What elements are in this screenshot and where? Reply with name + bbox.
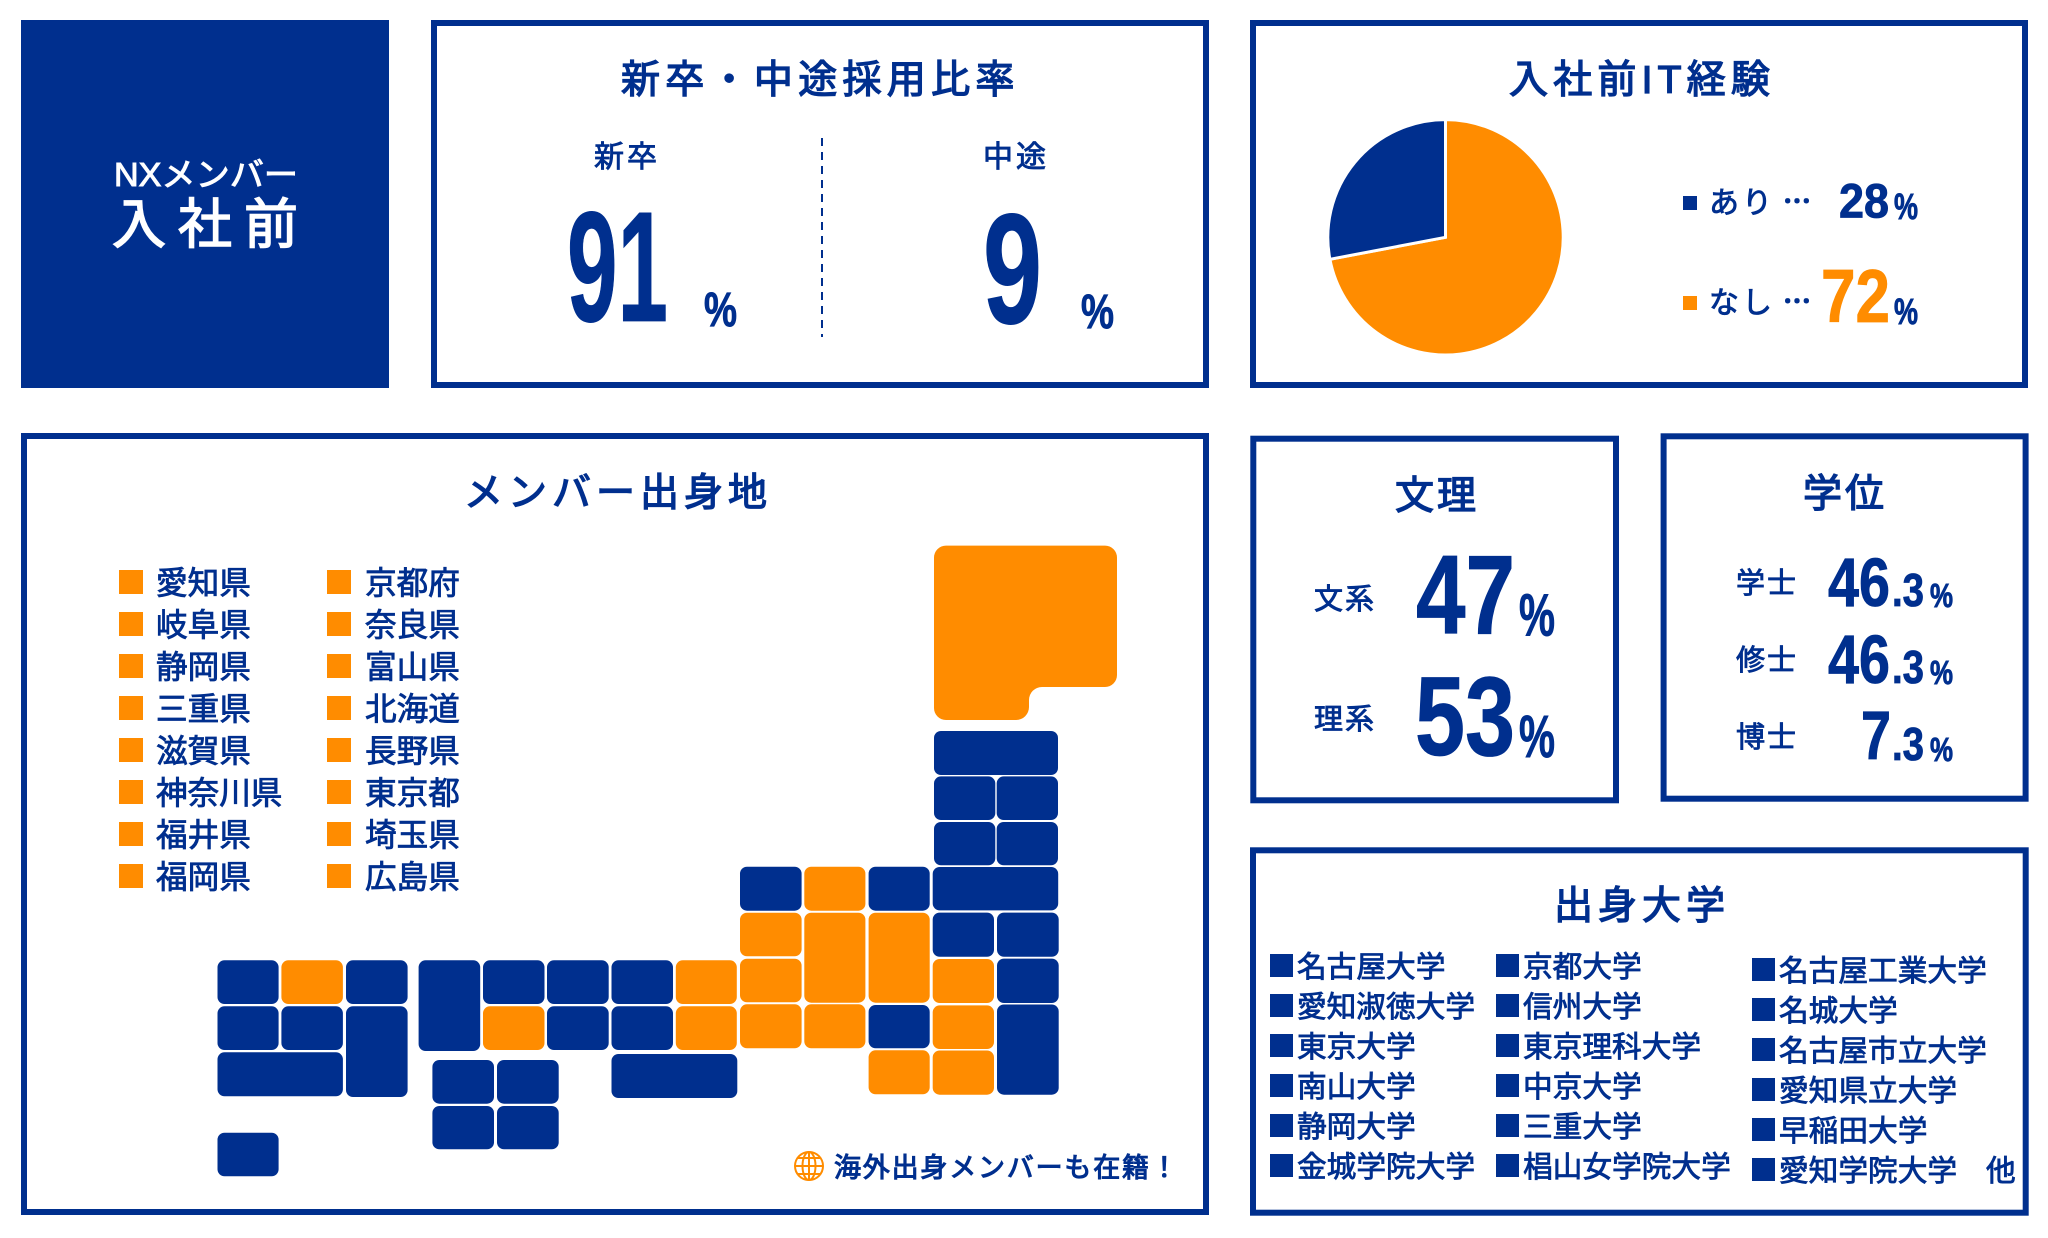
university list: column 1: 愛知淑徳大学 xyxy=(1297,991,1475,1024)
stat: bachelor 46.3%: % xyxy=(1930,577,1953,614)
stat: master 46.3%: 46 xyxy=(1828,621,1890,698)
stat: sciences 53%: % xyxy=(1519,704,1555,770)
stat: mid-career 9% xyxy=(983,141,1114,357)
university list: column 3: 愛知学院大学 xyxy=(1779,1155,1957,1188)
stat: master 46.3%: % xyxy=(1930,654,1953,691)
stat: new graduates 91%: 新卒 xyxy=(594,141,660,174)
legend: no 72% xyxy=(1683,254,1918,338)
prefecture list: column 2: 北海道 xyxy=(365,691,460,727)
university list: column 2: 東京理科大学 xyxy=(1523,1031,1701,1064)
stat: doctorate 7.3% xyxy=(1736,697,1953,774)
stat: humanities 47%: % xyxy=(1519,583,1555,649)
stat: doctorate 7.3%: 博士 xyxy=(1736,721,1798,754)
stat: humanities 47% xyxy=(1314,532,1555,658)
heading: humanities and sciences: 文理 xyxy=(1395,475,1479,518)
map: Shikoku xyxy=(432,1060,559,1149)
heading: alma maters: 出身大学 xyxy=(1554,885,1730,928)
stat: bachelor 46.3%: 学士 xyxy=(1736,567,1798,600)
prefecture list: column 1 xyxy=(119,565,282,895)
stat: new graduates 91%: 91 xyxy=(567,180,668,355)
stat: new graduates 91%: % xyxy=(704,284,737,337)
prefecture list: column 1: 福井県 xyxy=(156,817,251,853)
legend: no 72%: 72 xyxy=(1821,254,1890,338)
map: Kinki xyxy=(612,960,737,1098)
legend: yes 28%: … xyxy=(1783,181,1811,221)
prefecture list: column 1: 静岡県 xyxy=(156,649,251,685)
university list: column 2: 椙山女学院大学 xyxy=(1523,1151,1731,1184)
stat: master 46.3% xyxy=(1736,621,1953,698)
panel: degree xyxy=(1664,436,2026,799)
university list: column 3: 愛知県立大学 xyxy=(1779,1075,1957,1108)
map: Chugoku xyxy=(419,960,609,1051)
university list: column 1 xyxy=(1270,951,1475,1184)
university list: column 2: 京都大学 xyxy=(1523,951,1642,984)
university list: column 3: 名城大学 xyxy=(1779,995,1898,1028)
stat: mid-career 9%: 中途 xyxy=(983,141,1049,174)
title block: NX members before joining xyxy=(21,20,389,388)
legend: yes 28%: 28 xyxy=(1839,176,1889,228)
stat: humanities 47%: 47 xyxy=(1416,532,1515,658)
university list: column 1: 南山大学 xyxy=(1297,1071,1416,1104)
stat: bachelor 46.3%: 46 xyxy=(1828,544,1890,621)
map: Chubu xyxy=(740,867,930,1094)
panel: new graduate / mid-career ratio xyxy=(434,23,1206,385)
stat: mid-career 9%: % xyxy=(1081,286,1114,339)
university list: column 1: 静岡大学 xyxy=(1297,1111,1416,1144)
prefecture list: column 1: 愛知県 xyxy=(156,565,251,601)
prefecture list: column 2: 東京都 xyxy=(365,775,460,811)
prefecture list: column 1: 福岡県 xyxy=(156,859,251,895)
stat: mid-career 9%: 9 xyxy=(983,182,1042,357)
legend: yes 28% xyxy=(1683,176,1918,228)
heading: IT experience: 入社前IT経験 xyxy=(1509,59,1775,102)
legend: yes 28%: % xyxy=(1894,186,1918,227)
prefecture list: column 2: 京都府 xyxy=(365,565,460,601)
map: Hokkaido xyxy=(934,546,1117,720)
university list: column 2: 中京大学 xyxy=(1523,1071,1642,1104)
prefecture list: column 1: 岐阜県 xyxy=(156,607,251,643)
map: Kyushu xyxy=(218,960,408,1097)
heading: member origin: メンバー出身地 xyxy=(464,472,772,515)
icon: globe xyxy=(795,1152,823,1180)
stat: bachelor 46.3%: .3 xyxy=(1892,564,1924,616)
heading: degree: 学位 xyxy=(1803,473,1887,516)
title block: NX members before joining: 入社前 xyxy=(112,195,310,255)
stat: bachelor 46.3% xyxy=(1736,544,1953,621)
stat: sciences 53%: 理系 xyxy=(1314,704,1376,736)
stat: sciences 53% xyxy=(1314,654,1555,779)
tile map of Japan xyxy=(218,546,1117,1176)
university list: column 3: 名古屋工業大学 xyxy=(1779,955,1987,988)
panel: pre-joining IT experience xyxy=(1253,23,2025,385)
prefecture list: column 2: 埼玉県 xyxy=(365,817,460,853)
university list: column 1: 金城学院大学 xyxy=(1297,1151,1475,1184)
university list: column 3: 他 xyxy=(1986,1155,2016,1188)
map: Okinawa xyxy=(218,1133,279,1176)
prefecture list: column 2: 広島県 xyxy=(365,859,460,895)
stat: doctorate 7.3%: % xyxy=(1930,731,1953,768)
prefecture list: column 1: 滋賀県 xyxy=(156,733,251,769)
panel: member hometowns xyxy=(24,436,1206,1212)
stat: master 46.3%: .3 xyxy=(1892,641,1924,693)
prefecture list: column 2: 奈良県 xyxy=(365,607,460,643)
legend: no 72%: なし xyxy=(1709,287,1775,320)
stat: doctorate 7.3%: .3 xyxy=(1892,718,1924,770)
stat: sciences 53%: 53 xyxy=(1415,654,1515,779)
stat: master 46.3%: 修士 xyxy=(1736,644,1798,677)
university list: column 1: 名古屋大学 xyxy=(1297,951,1445,984)
university list: column 2: 信州大学 xyxy=(1523,991,1642,1024)
title block: NX members before joining: NXメンバー xyxy=(114,156,298,193)
heading: hiring ratio: 新卒・中途採用比率 xyxy=(621,59,1020,102)
stat: doctorate 7.3%: 7 xyxy=(1861,697,1891,774)
prefecture list: column 1: 三重県 xyxy=(156,691,251,727)
panel: universities xyxy=(1253,850,2026,1213)
university list: column 3: 早稲田大学 xyxy=(1779,1115,1927,1148)
legend: yes 28%: あり xyxy=(1709,187,1775,220)
note: overseas members: 海外出身メンバーも在籍！ xyxy=(834,1153,1180,1183)
university list: column 2: 三重大学 xyxy=(1523,1111,1642,1144)
legend: no 72%: … xyxy=(1783,281,1811,321)
university list: column 3 xyxy=(1752,955,2016,1188)
panel: humanities vs sciences xyxy=(1253,439,1616,800)
stat: humanities 47%: 文系 xyxy=(1314,583,1376,616)
university list: column 3: 名古屋市立大学 xyxy=(1779,1035,1987,1068)
pie chart: 28% yes, 72% no xyxy=(1328,120,1563,355)
prefecture list: column 2: 富山県 xyxy=(365,649,460,685)
map: Tohoku and Kanto xyxy=(933,731,1059,1095)
prefecture list: column 2: 長野県 xyxy=(365,733,460,769)
prefecture list: column 2 xyxy=(327,565,460,895)
university list: column 2 xyxy=(1496,951,1731,1184)
prefecture list: column 1: 神奈川県 xyxy=(156,775,282,811)
university list: column 1: 東京大学 xyxy=(1297,1031,1416,1064)
legend: no 72%: % xyxy=(1894,291,1918,332)
